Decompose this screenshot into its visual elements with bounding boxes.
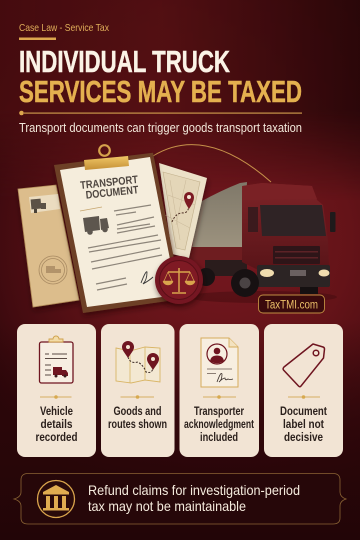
document title: DOCUMENT xyxy=(85,184,139,202)
TaxTMI badge xyxy=(258,295,324,313)
card: document label xyxy=(264,324,343,457)
document title: TRANSPORT xyxy=(80,174,139,192)
card label: details xyxy=(40,417,73,431)
icon: clipboard with truck xyxy=(40,336,73,383)
clipboard paper xyxy=(60,157,177,307)
card label: Document xyxy=(280,404,327,418)
card divider xyxy=(120,396,154,398)
callout text: Refund claims for investigation-period xyxy=(88,482,300,498)
card label: routes shown xyxy=(108,417,167,431)
title: INDIVIDUAL TRUCK xyxy=(19,44,230,79)
document lines xyxy=(80,205,162,290)
map pin xyxy=(184,192,194,209)
card divider xyxy=(203,396,236,398)
title divider xyxy=(19,111,302,115)
stamp xyxy=(39,256,67,284)
card: vehicle details xyxy=(17,324,96,457)
scales of justice xyxy=(163,268,195,293)
small truck label xyxy=(29,194,60,213)
card label: Goods and xyxy=(114,404,162,418)
icon: map with pins xyxy=(116,341,160,383)
card label: recorded xyxy=(36,430,78,444)
card label xyxy=(36,404,78,444)
subtitle: Transport documents can trigger goods transport taxation xyxy=(19,121,302,135)
signature xyxy=(141,272,153,284)
TaxTMI badge: TaxTMI.com xyxy=(265,300,318,312)
truck cargo bed xyxy=(190,247,247,286)
card label: included xyxy=(200,430,238,444)
card divider xyxy=(288,396,320,398)
title xyxy=(19,44,302,109)
illustration: clipboard xyxy=(54,145,182,313)
card label: acknowledgment xyxy=(184,417,254,431)
icon: tag xyxy=(283,344,324,387)
callout text xyxy=(88,482,300,514)
card label xyxy=(184,404,254,444)
kicker: case law label: Case Law - Service Tax xyxy=(19,22,110,34)
card label: label not xyxy=(283,417,324,431)
decorative arc xyxy=(153,145,271,182)
truck cab xyxy=(231,183,336,297)
icon: signed document with person xyxy=(201,338,238,387)
card label xyxy=(108,404,167,431)
kicker: case law label xyxy=(19,22,110,40)
icon: courthouse xyxy=(38,480,74,518)
callout text: tax may not be maintainable xyxy=(88,498,246,514)
card label: Transporter xyxy=(194,404,244,418)
card label: decisive xyxy=(284,430,323,444)
card: goods and routes xyxy=(101,324,174,457)
callout: refund claims xyxy=(14,474,346,524)
card label xyxy=(280,404,327,444)
document truck icon xyxy=(83,216,109,235)
illustration: back envelope xyxy=(18,185,79,307)
card divider xyxy=(40,396,72,398)
wax seal with scales xyxy=(155,256,203,304)
truck cargo canopy xyxy=(192,182,247,247)
card label: Vehicle xyxy=(40,404,73,418)
clipboard clip xyxy=(84,145,129,170)
illustration: route map xyxy=(159,163,207,258)
card: transporter acknowledgment xyxy=(180,324,259,457)
illustration: truck xyxy=(187,182,337,303)
document title xyxy=(80,174,139,202)
